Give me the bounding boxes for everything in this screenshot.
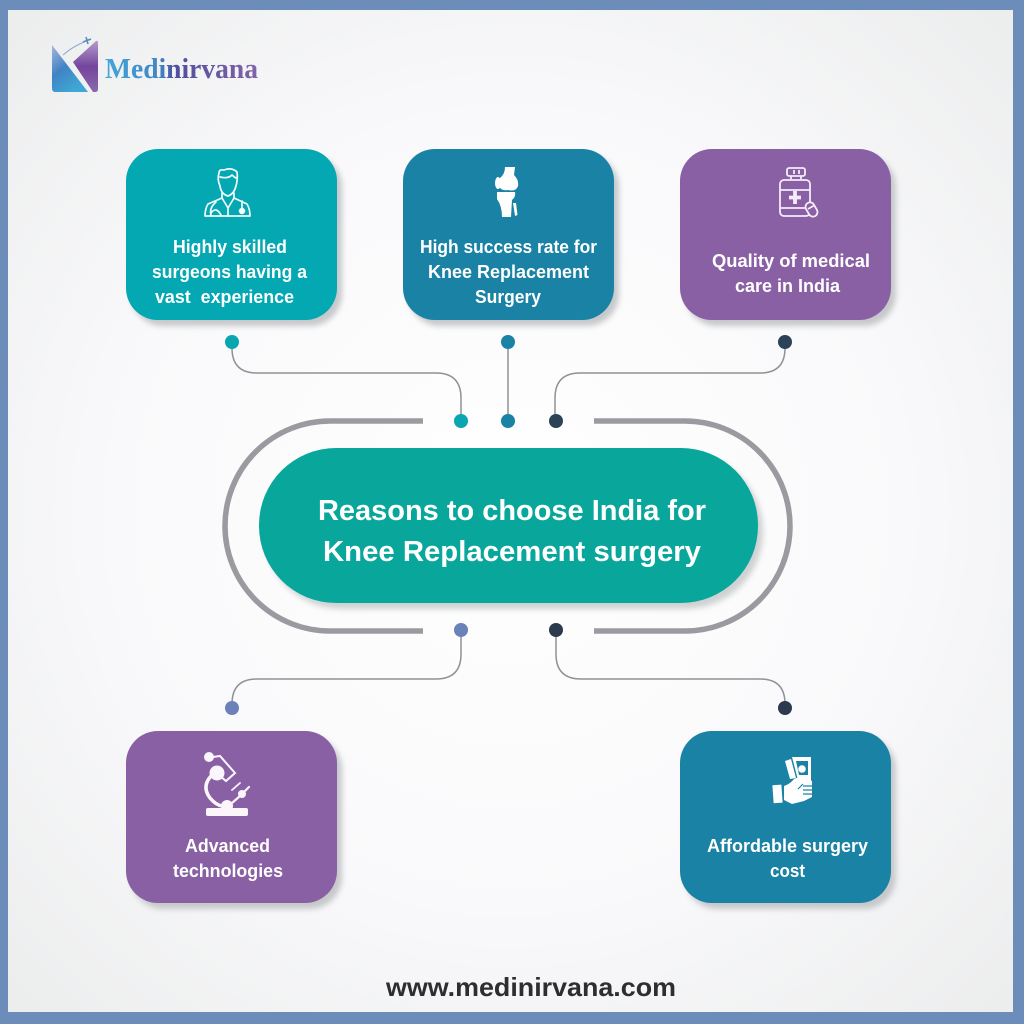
central pill: [259, 448, 763, 609]
panel: quality of medical care: [680, 149, 896, 326]
icon: microscope: [204, 752, 249, 816]
outer bracket: left: [225, 421, 423, 631]
text: affordable surgery cost: Affordable surgery: [707, 836, 868, 856]
text: advanced technologies: Advanced: [185, 836, 270, 856]
text: advanced technologies: [173, 836, 283, 881]
connectors: bottom: [232, 630, 785, 708]
text: high success rate: Knee Replacement: [428, 262, 589, 282]
text: skilled surgeons: Highly skilled: [173, 237, 287, 257]
icon: knee joint: [495, 167, 518, 217]
title: [318, 495, 706, 568]
text: quality of medical care: Quality of medical: [712, 251, 870, 271]
title: Knee Replacement surgery: [323, 536, 701, 568]
text: affordable surgery cost: [707, 836, 868, 881]
panel: skilled surgeons: [126, 149, 342, 326]
logo: Medinirvana: [52, 37, 258, 92]
panel: high success rate: [403, 149, 619, 326]
text: high success rate: [420, 237, 597, 307]
connector dots: [225, 335, 792, 715]
panel: advanced technologies: [126, 731, 342, 909]
icon: logo mark: [52, 37, 98, 92]
text: quality of medical care: [712, 251, 870, 296]
title: Reasons to choose India for: [318, 495, 706, 527]
footer website: www.medinirvana.com: [385, 972, 676, 1002]
icon: hand holding money: [772, 757, 812, 804]
connectors: top: [232, 342, 785, 420]
wordmark: Medinirvana: [105, 54, 258, 85]
text: advanced technologies: technologies: [173, 861, 283, 881]
text: skilled surgeons: [152, 237, 308, 307]
text: high success rate: High success rate for: [420, 237, 597, 257]
icon: doctor: [205, 169, 250, 216]
panel: affordable surgery cost: [680, 731, 896, 909]
text: quality of medical care: care in India: [735, 276, 841, 296]
text: affordable surgery cost: cost: [770, 861, 805, 881]
text: skilled surgeons: vast experience: [155, 287, 294, 307]
outer bracket: right: [594, 421, 790, 631]
text: skilled surgeons: surgeons having a: [152, 262, 308, 282]
icon: medicine bottle: [780, 168, 819, 218]
text: high success rate: Surgery: [475, 287, 541, 307]
